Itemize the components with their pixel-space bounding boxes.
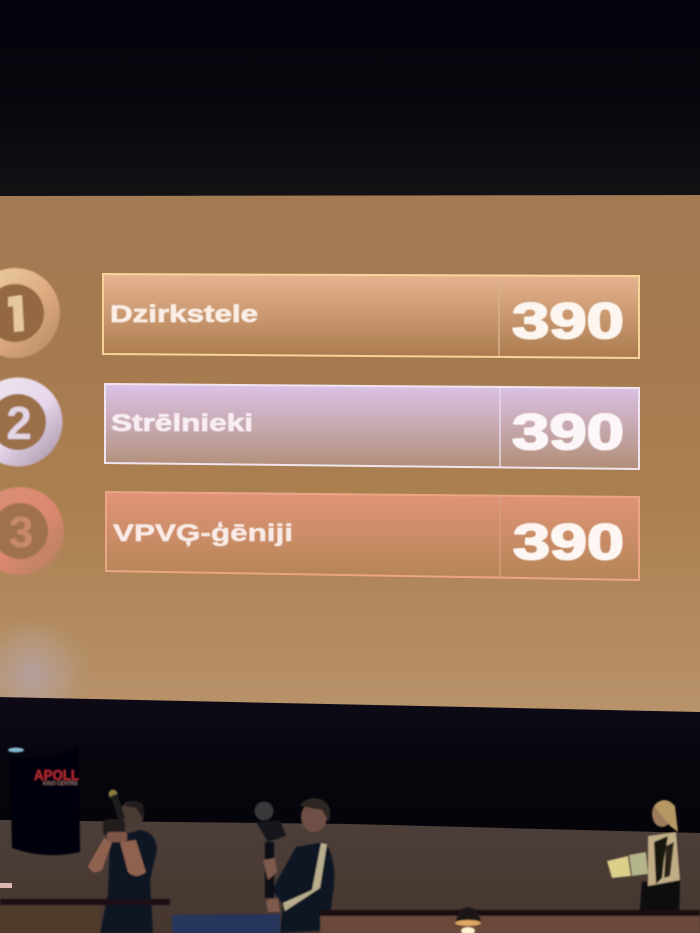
numeral 2: 2 bbox=[6, 397, 32, 449]
Apollo logo text: APOLL bbox=[34, 767, 79, 784]
skirt bbox=[639, 878, 680, 922]
front railing and carpet bbox=[0, 899, 700, 933]
lower dark wall bbox=[0, 695, 700, 835]
team name: VPVĢ-ģēniji bbox=[113, 520, 293, 547]
score: 390 bbox=[513, 514, 624, 570]
stage floor bbox=[0, 820, 700, 933]
jacket stripe bbox=[283, 843, 327, 911]
head bbox=[652, 801, 672, 827]
Apollo banner stand bbox=[8, 746, 80, 855]
medal 1 bbox=[0, 268, 60, 358]
head bbox=[120, 801, 144, 827]
torso bbox=[272, 842, 334, 933]
head bbox=[301, 802, 327, 832]
camera bbox=[103, 819, 125, 836]
row 1: Dzirkstele 390 bbox=[103, 274, 639, 358]
medal 3 bbox=[0, 487, 64, 575]
numeral 3: 3 bbox=[9, 508, 33, 557]
team name: Strēlnieki bbox=[111, 410, 253, 437]
team name: Dzirkstele bbox=[110, 301, 258, 328]
cameraman with gimbal bbox=[254, 798, 334, 933]
torso bbox=[100, 830, 157, 933]
gimbal bbox=[256, 820, 286, 842]
gift box bbox=[607, 856, 631, 878]
row 2: Strēlnieki 390 bbox=[105, 384, 639, 469]
pale glow at screen corner bbox=[0, 626, 78, 698]
medal 2 bbox=[0, 378, 62, 466]
monitor at left edge bbox=[0, 883, 12, 888]
score: 390 bbox=[512, 293, 624, 349]
table lamp bbox=[455, 907, 481, 933]
dark wall above the screen bbox=[0, 0, 700, 200]
woman with gift box bbox=[607, 800, 680, 922]
score: 390 bbox=[512, 404, 624, 460]
Apollo sub line: KINO CENTRS bbox=[43, 781, 78, 787]
projection screen bbox=[0, 195, 700, 737]
arms bbox=[88, 838, 112, 872]
numeral 1 bbox=[8, 295, 24, 332]
row 3: VPVĢ-ģēniji 390 bbox=[106, 492, 639, 580]
photographer bbox=[88, 790, 157, 933]
striped blouse bbox=[648, 832, 680, 886]
